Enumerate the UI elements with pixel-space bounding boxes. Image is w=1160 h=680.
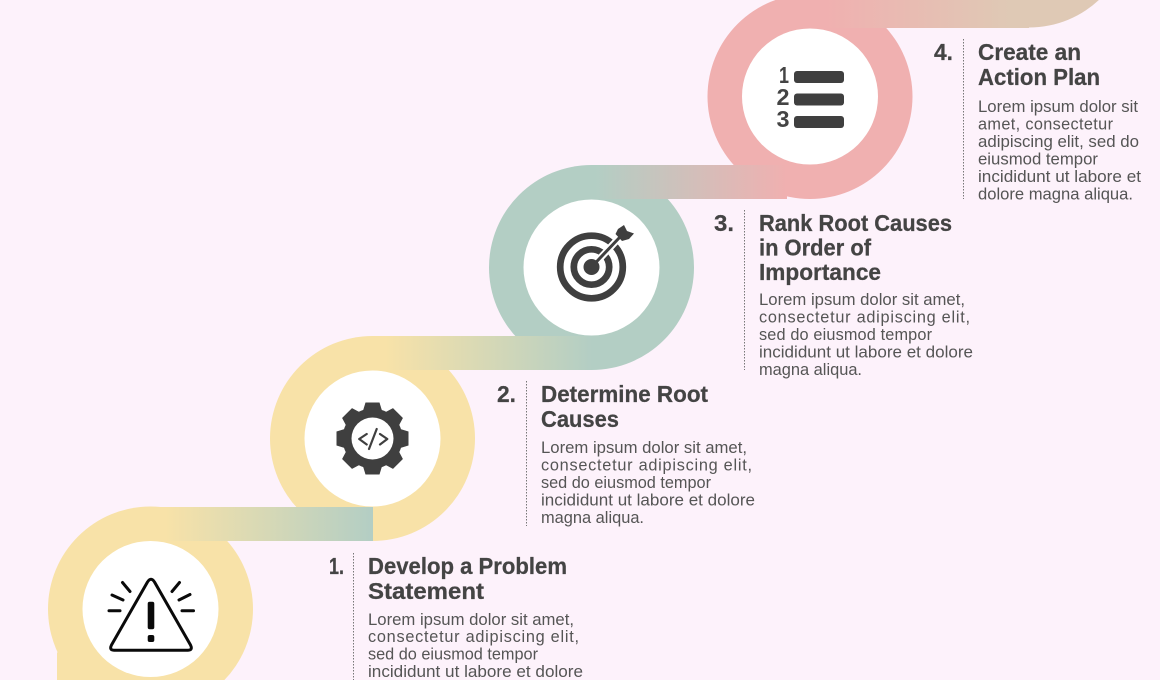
step 4 body: dolore magna aliqua. <box>978 186 1133 204</box>
icon: numbered list <box>776 62 844 132</box>
step 1 text block <box>329 553 583 680</box>
ring: step 1 <box>48 506 253 680</box>
step 3 body: Lorem ipsum dolor sit amet, <box>759 291 965 309</box>
step 1 body: consectetur adipiscing elit, <box>368 628 579 646</box>
step 3 body: consectetur adipiscing elit, <box>759 308 970 326</box>
step 3 heading: Rank Root Causes <box>759 210 952 236</box>
step 4 body <box>978 98 1141 204</box>
white disc: step 1 <box>82 541 218 677</box>
step 3 body: incididunt ut labore et dolore <box>759 344 973 362</box>
icon: target with arrow <box>560 225 634 298</box>
white disc: step 4 <box>742 28 878 164</box>
step 1 number: 1. <box>329 553 344 579</box>
ring: step 2 <box>270 336 475 541</box>
ring: step 3 <box>489 165 694 370</box>
step 4 body: Lorem ipsum dolor sit <box>978 98 1138 116</box>
step 2 number: 2. <box>497 381 516 407</box>
step 4 body: adipiscing elit, sed do <box>978 133 1139 151</box>
step 3 text block <box>714 210 973 379</box>
step 2 body: sed do eiusmod tempor <box>541 474 712 492</box>
step 3 heading <box>759 210 952 285</box>
step 1 body: Lorem ipsum dolor sit amet, <box>368 611 574 629</box>
step 2 body: Lorem ipsum dolor sit amet, <box>541 439 747 457</box>
icon: warning triangle <box>109 579 194 650</box>
connector band 4 to next <box>810 0 1029 28</box>
step 3 heading: Importance <box>759 259 881 285</box>
step 2 body: consectetur adipiscing elit, <box>541 456 752 474</box>
step 3 number: 3. <box>714 210 734 236</box>
ring: step 4 <box>708 0 912 199</box>
step 4 number: 4. <box>934 39 953 65</box>
step 2 text block <box>497 381 755 527</box>
step 4 text block <box>934 39 1141 204</box>
step 1 body <box>368 611 583 680</box>
step 2 body: incididunt ut labore et dolore <box>541 492 755 510</box>
step 3 body <box>759 291 973 379</box>
step 4 heading <box>978 39 1100 90</box>
step 3 heading: in Order of <box>759 234 871 260</box>
step 4 body: incididunt ut labore et <box>978 168 1141 186</box>
step 2 heading <box>541 381 708 432</box>
step 1 body: sed do eiusmod tempor <box>368 646 539 664</box>
white disc: step 2 <box>304 370 440 506</box>
connector band 3 to 4 <box>591 165 787 199</box>
icon: numbered list: 3 <box>776 106 790 132</box>
step 2 body <box>541 439 755 527</box>
step 3 body: sed do eiusmod tempor <box>759 326 933 344</box>
next step ring cropped at top right <box>926 0 1132 28</box>
connector band 2 to 3 <box>372 336 592 370</box>
step 2 heading: Determine Root <box>541 381 708 407</box>
step 1 heading: Develop a Problem <box>368 553 567 579</box>
step 4 heading: Create an <box>978 39 1081 65</box>
icon: gear with code <box>336 402 408 474</box>
step 1 heading <box>368 553 567 604</box>
step 3 body: magna aliqua. <box>759 361 862 379</box>
step 1 heading: Statement <box>368 578 484 604</box>
connector band 1 to 2 <box>150 507 373 541</box>
icon: numbered list: 1 <box>779 62 789 88</box>
step 2 heading: Causes <box>541 406 619 432</box>
step 4 heading: Action Plan <box>978 64 1100 90</box>
white disc: step 3 <box>524 200 660 336</box>
step 2 body: magna aliqua. <box>541 509 644 527</box>
step 4 body: amet, consectetur <box>978 116 1114 134</box>
step 4 body: eiusmod tempor <box>978 150 1099 168</box>
icon: numbered list: 2 <box>776 84 790 110</box>
